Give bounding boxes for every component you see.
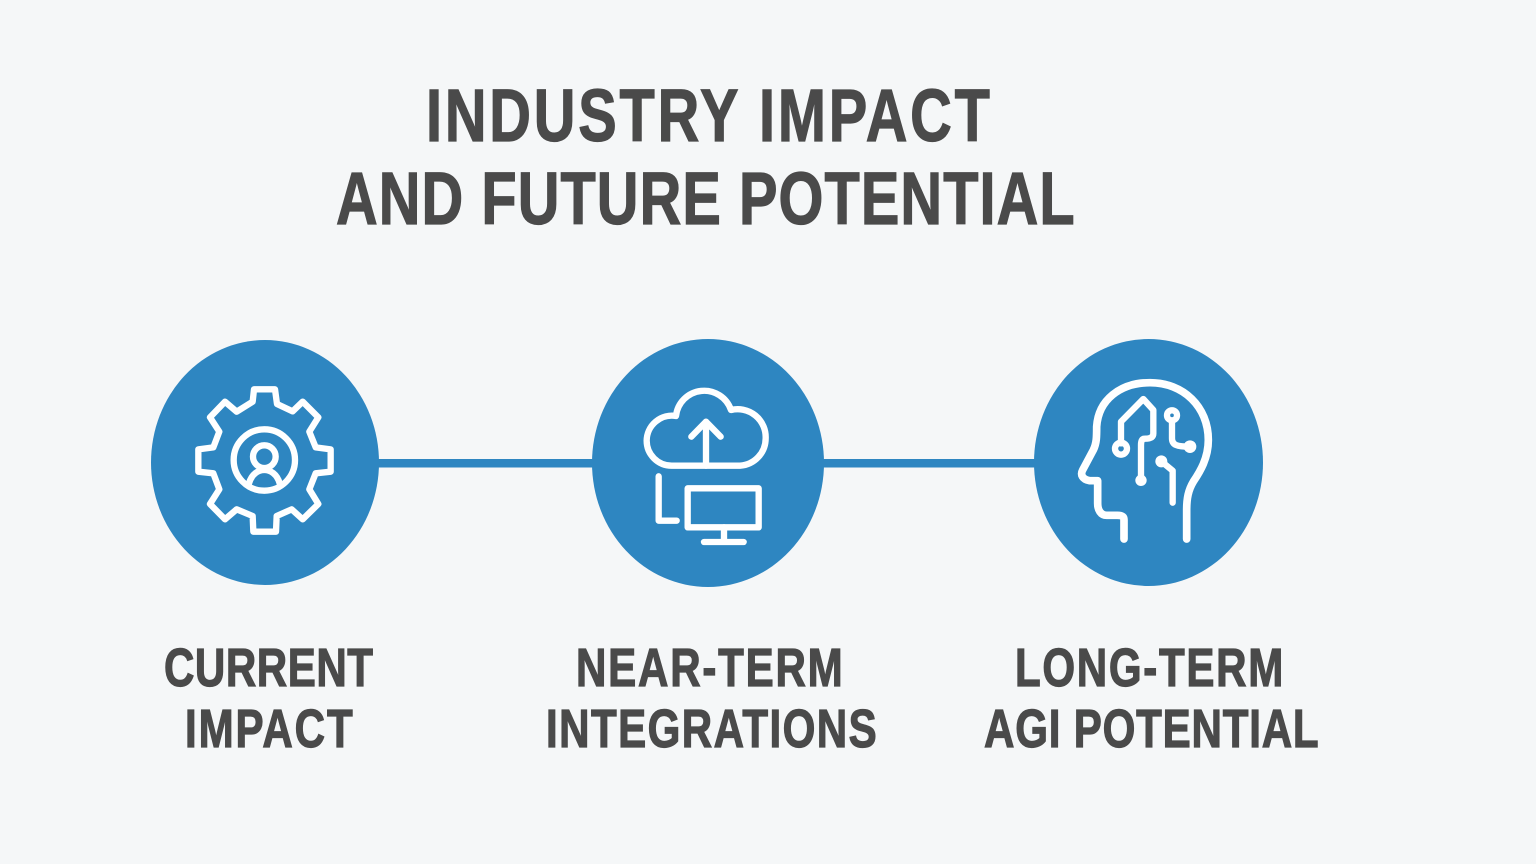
stage: current impact circle (151, 340, 379, 585)
label: current impact: IMPACT (185, 699, 353, 759)
icon: cloud upload and computer monitor (647, 391, 766, 542)
icon: gear with person (198, 389, 331, 532)
title: AND FUTURE POTENTIAL (336, 158, 1075, 241)
label: near-term integrations (546, 638, 877, 759)
label: current impact (164, 638, 373, 759)
label: current impact: CURRENT (164, 638, 373, 698)
connector line: near-term to long-term (820, 459, 1038, 468)
label: long-term AGI potential: LONG-TERM (1015, 638, 1283, 698)
label: near-term integrations: NEAR-TERM (576, 638, 843, 698)
stage: near-term integrations circle (592, 339, 824, 587)
stage: long-term AGI potential circle (1034, 339, 1263, 586)
label: long-term AGI potential (984, 638, 1319, 759)
label: near-term integrations: INTEGRATIONS (546, 699, 877, 759)
icon: head with circuit brain (1082, 383, 1208, 539)
title (336, 75, 1075, 241)
connector line: current to near-term (375, 459, 596, 468)
title: INDUSTRY IMPACT (426, 75, 990, 158)
label: long-term AGI potential: AGI POTENTIAL (984, 699, 1319, 759)
